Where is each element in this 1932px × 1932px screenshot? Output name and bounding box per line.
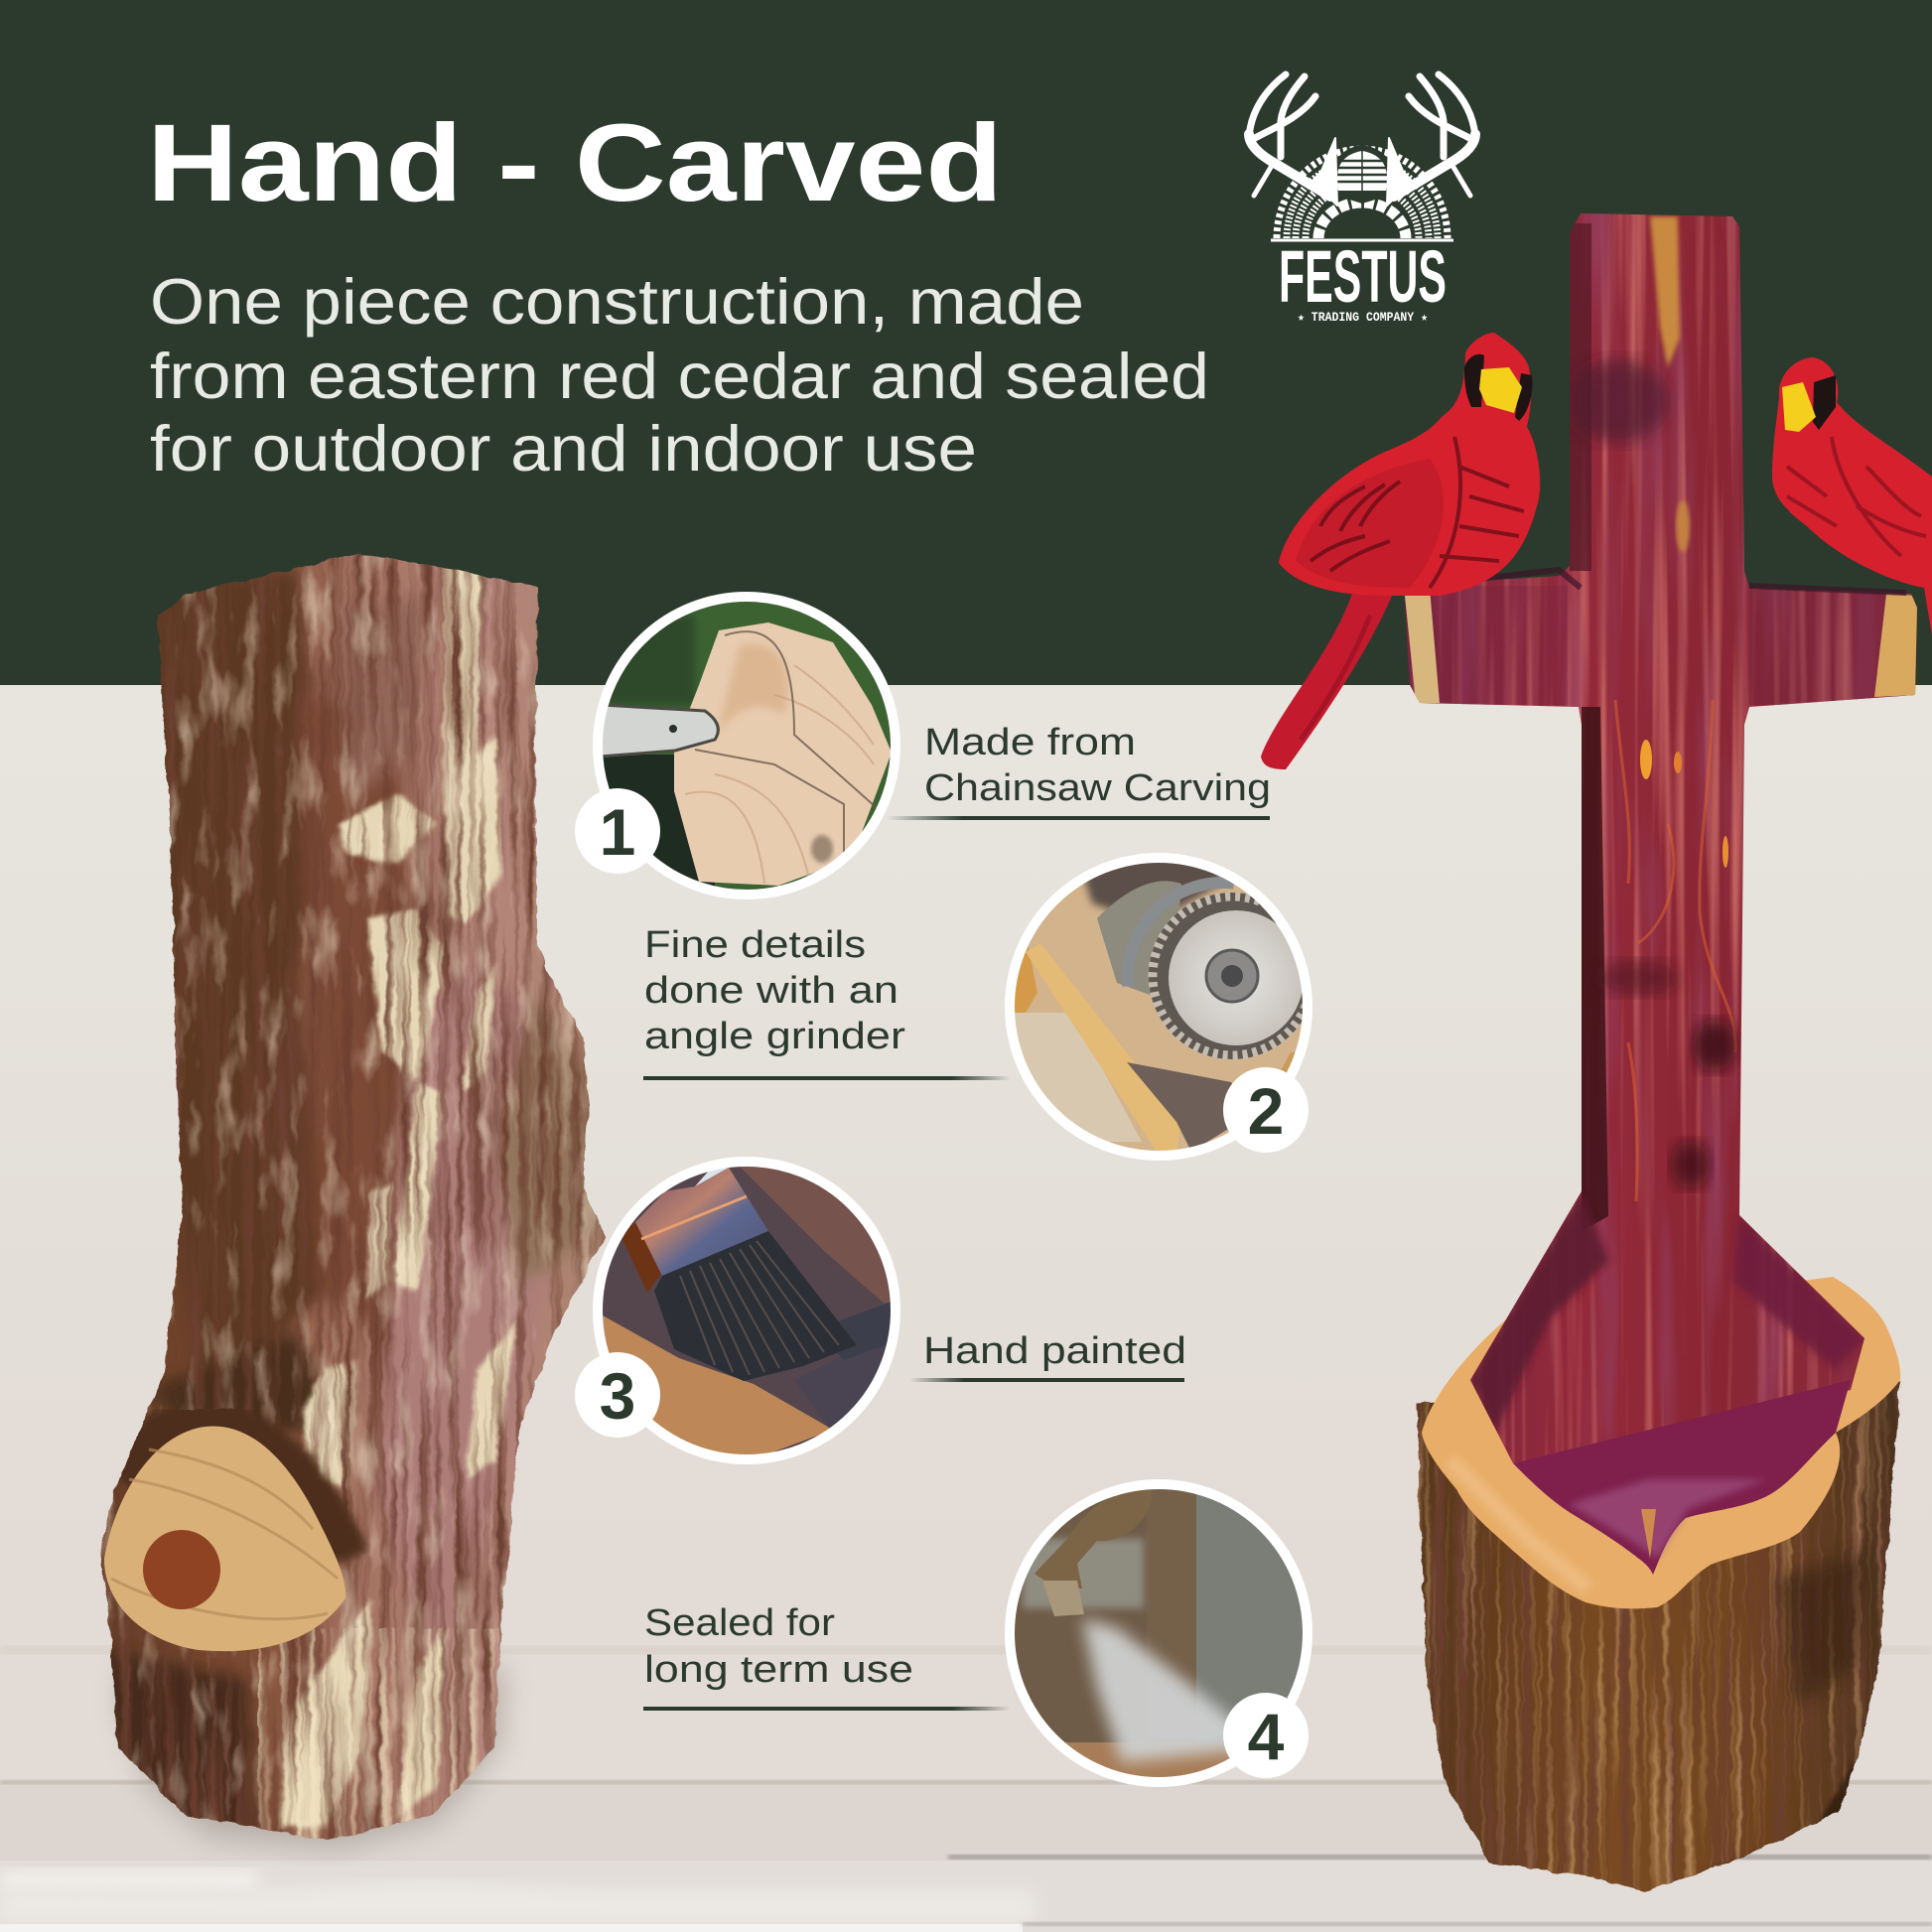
step 2: angle grinder	[643, 854, 1326, 1162]
step 3 badge	[575, 1352, 660, 1438]
chainsaw bar	[601, 705, 718, 757]
logo center carving	[1332, 145, 1393, 204]
wood strip	[1026, 943, 1181, 1152]
step 4 badge	[1223, 1693, 1309, 1778]
step 4: sealed	[643, 1484, 1315, 1787]
cross flare shading	[1470, 1191, 1608, 1433]
log ground shadow	[119, 1668, 506, 1849]
log knot heartwood	[143, 1530, 220, 1609]
step 2 label: angle grinder	[644, 1016, 905, 1057]
step 2 label	[644, 924, 905, 1057]
step 4 photo ring	[1010, 1484, 1308, 1782]
log cut knot	[104, 1427, 345, 1651]
step 4 photo	[1008, 1484, 1315, 1787]
background: wall and floor	[0, 685, 1932, 1932]
logo antler right	[1387, 74, 1475, 206]
stump seat	[1513, 1380, 1851, 1575]
left cardinal mask	[1464, 354, 1532, 421]
title: Hand - Carved	[147, 102, 1003, 224]
logo tagline: ★ TRADING COMPANY ★	[1298, 311, 1428, 325]
cardinal: left	[1261, 333, 1540, 769]
step 2 badge: 2	[1248, 1074, 1284, 1148]
step 2 photo	[1015, 863, 1303, 1151]
logo wordmark: FESTUS	[1279, 235, 1447, 318]
raw cedar log	[89, 536, 616, 1857]
left cardinal wing	[1296, 459, 1444, 588]
subtitle	[150, 265, 1209, 484]
brush ferrule	[635, 1168, 768, 1276]
step 4 label: Sealed for	[644, 1602, 835, 1644]
step 1 label	[924, 722, 1271, 809]
carved cross on stump	[1400, 208, 1926, 1901]
step 1: chainsaw carving	[575, 596, 1271, 903]
right cardinal beak	[1782, 382, 1816, 432]
right cardinal mask	[1813, 375, 1836, 430]
step 4 label: long term use	[644, 1649, 913, 1691]
spray mist	[1082, 1618, 1266, 1762]
left cardinal body	[1279, 333, 1540, 596]
log bark streaks	[89, 536, 616, 1857]
stump bark	[1410, 1370, 1906, 1901]
step 3 photo ring	[598, 1162, 896, 1459]
step 1 photo ring	[598, 597, 896, 895]
logo antler left	[1249, 74, 1337, 206]
cross body	[1400, 208, 1926, 1479]
step 3 badge: 3	[600, 1359, 635, 1433]
left cardinal beak	[1479, 367, 1522, 413]
step 3 label: Hand painted	[923, 1330, 1186, 1372]
cross sapwood streak	[1650, 216, 1680, 367]
step 2 label: Fine details	[644, 924, 866, 966]
cross dark knots	[1569, 359, 1668, 443]
step 1 label: Made from	[924, 722, 1136, 763]
step 2 badge	[1223, 1067, 1309, 1153]
subtitle: One piece construction, made	[150, 265, 1084, 338]
sprayer nozzle	[1035, 1484, 1152, 1588]
stump cut top	[1422, 1277, 1900, 1608]
subtitle: for outdoor and indoor use	[150, 412, 977, 484]
logo wood ring	[1271, 149, 1453, 240]
cardinal: right	[1772, 357, 1932, 635]
step 2 leader line	[643, 1076, 1011, 1080]
step 1 badge	[575, 788, 660, 874]
log body	[89, 536, 616, 1857]
cross dark side faces	[1582, 707, 1608, 1231]
brush handle	[621, 1222, 662, 1293]
step 1 leader line	[887, 816, 1270, 820]
step 2 label: done with an	[644, 970, 898, 1012]
step 4 leader line	[643, 1707, 1011, 1711]
grinder guard	[1122, 877, 1234, 987]
subtitle: from eastern red cedar and sealed	[150, 340, 1209, 412]
header band	[0, 0, 1932, 685]
step 4 badge: 4	[1248, 1700, 1285, 1773]
grinder chain disc	[1149, 893, 1315, 1059]
cross arm ends	[1405, 596, 1440, 703]
log pale sapwood patches	[278, 561, 516, 1827]
cross arm tint	[1404, 586, 1568, 705]
step 4 label	[644, 1602, 913, 1691]
step 1 label: Chainsaw Carving	[924, 767, 1271, 809]
logo: Festus Trading Company	[1249, 74, 1475, 325]
cross grain lines	[1615, 700, 1735, 1201]
step 2 photo ring	[1010, 858, 1308, 1156]
brush bristles	[654, 1231, 857, 1381]
cross arm top edges	[1415, 570, 1906, 593]
left cardinal tail	[1261, 594, 1392, 769]
step 1 photo	[603, 602, 891, 890]
wedge shadow	[1127, 1062, 1233, 1148]
right cardinal body	[1772, 357, 1932, 635]
step 3 photo	[596, 1162, 903, 1459]
step 1 badge: 1	[600, 795, 635, 869]
step 3: hand painted	[575, 1162, 1186, 1459]
step 3 leader line	[909, 1378, 1184, 1382]
sawdust pile	[1013, 1013, 1142, 1142]
